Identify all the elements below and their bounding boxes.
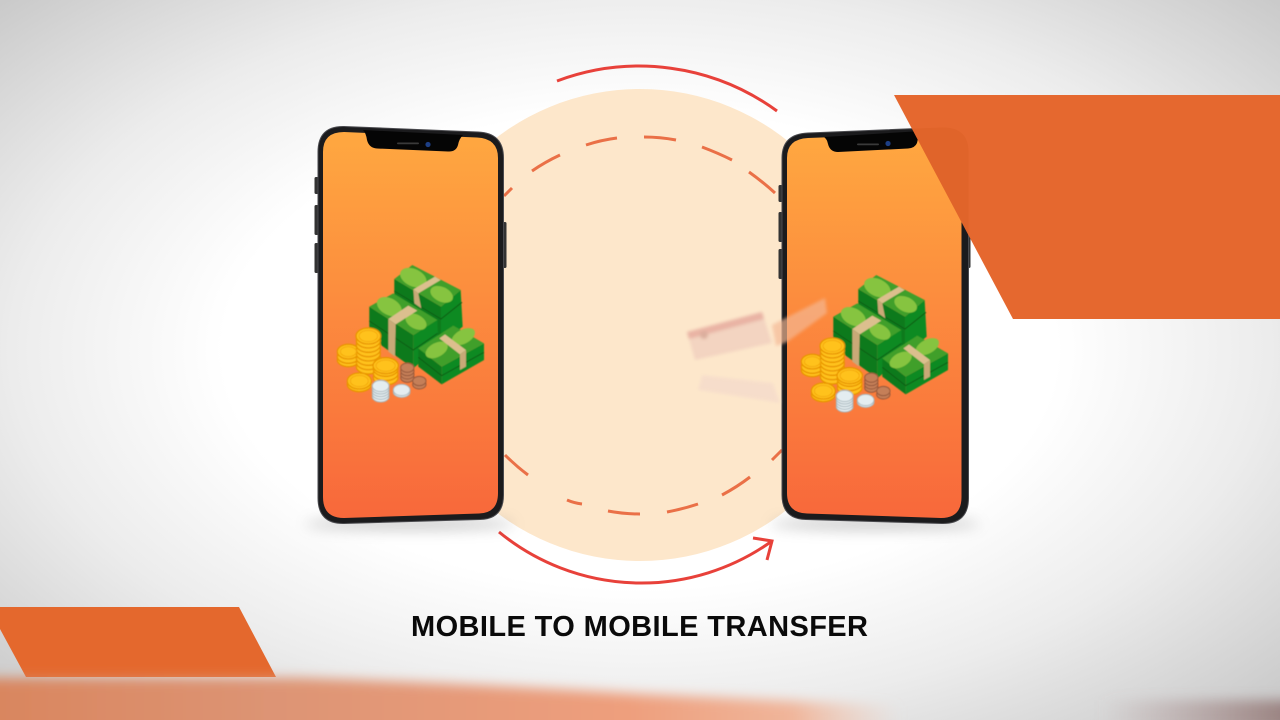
banknote lower (698, 375, 780, 403)
right phone notch (824, 131, 922, 152)
banknote upper band (687, 312, 764, 339)
peach circle (404, 89, 876, 561)
top red arc (557, 66, 777, 111)
left money pile (337, 264, 484, 402)
left phone camera (425, 142, 431, 147)
left phone screen (323, 132, 498, 518)
flying banknotes (687, 298, 827, 403)
top right orange banner (894, 95, 1280, 319)
left phone (314, 126, 506, 524)
right phone (778, 127, 970, 524)
right phone side buttons (778, 185, 970, 279)
dashed circular path (504, 137, 782, 514)
bottom right corner tint (1100, 700, 1280, 720)
left phone shadow (305, 518, 515, 530)
right phone speaker (857, 144, 879, 145)
left phone body (318, 126, 504, 524)
left phone speaker (397, 142, 419, 144)
bottom left orange banner (0, 607, 276, 677)
banknote upper (687, 312, 772, 360)
left phone notch (363, 130, 463, 152)
blurred bottom strip (0, 678, 900, 720)
title: MOBILE TO MOBILE TRANSFER (411, 611, 868, 643)
left phone side buttons (314, 177, 506, 273)
bottom red arc arrow (499, 532, 772, 583)
right phone shadow (770, 518, 980, 530)
banknote upper seal (700, 331, 708, 339)
right phone camera (885, 141, 891, 146)
phone ghost through banner (912, 129, 968, 235)
right phone body (782, 127, 968, 524)
right money pile (801, 274, 948, 412)
right phone screen (787, 133, 962, 518)
banknote upper tail (772, 298, 827, 346)
